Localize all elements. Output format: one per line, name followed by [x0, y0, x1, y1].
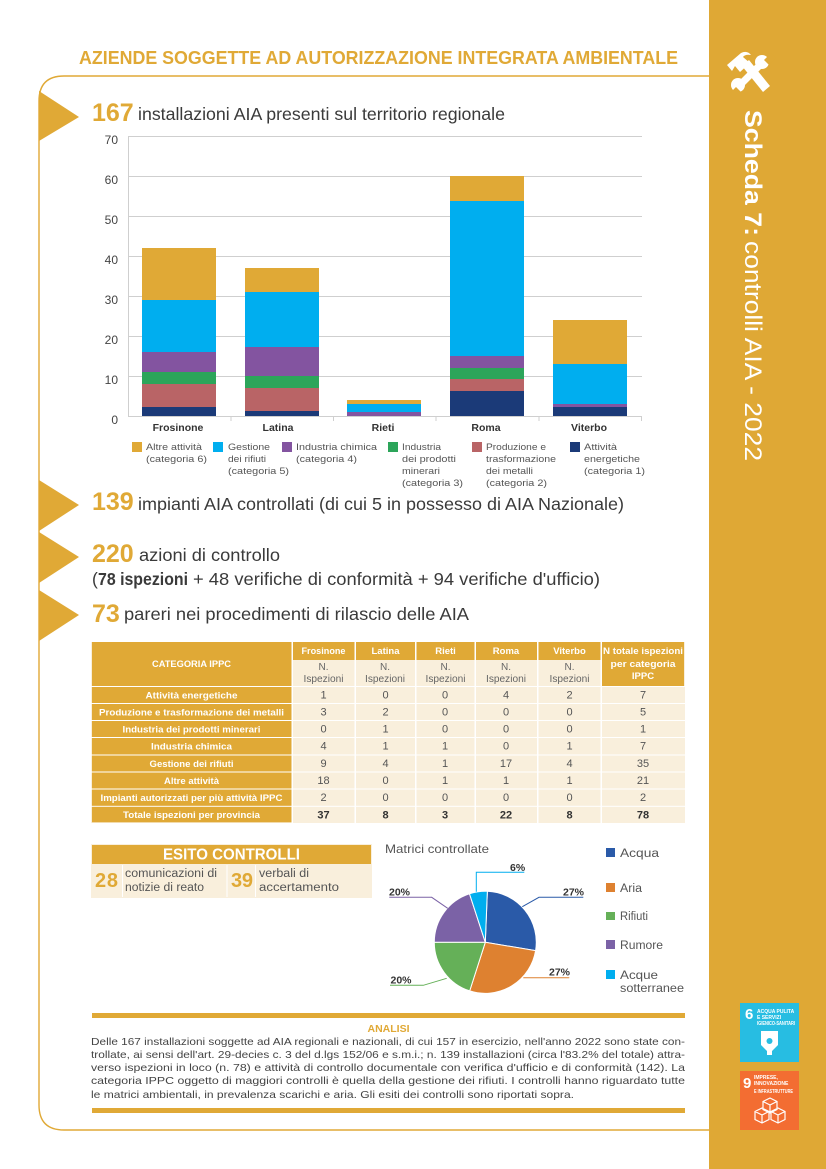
chart legend: minerari	[402, 466, 440, 477]
table values: 0	[382, 792, 389, 804]
table values: 0	[442, 792, 448, 804]
chart legend: trasformazione	[486, 454, 556, 465]
table header: Frosinone	[302, 646, 346, 657]
table header: Ispezioni	[304, 674, 344, 685]
y axis labels: 10	[105, 373, 118, 387]
esito heading	[92, 845, 371, 864]
table values: 8	[566, 810, 573, 822]
esito heading: ESITO CONTROLLI	[163, 846, 300, 864]
analysis text: trollate, ai sensi dell'art. 29-decies c. 3 del d.lgs 152/06 e s.m.i.; n. 139 installazioni (circa l'83.2% del totale) attra-	[91, 1049, 686, 1061]
bar: Frosinone	[142, 248, 216, 416]
stat: 220 control actions: azioni di controllo	[139, 545, 280, 565]
table header: Rieti	[435, 646, 456, 657]
analysis text	[91, 1036, 686, 1101]
table values: 2	[640, 792, 646, 804]
side title: controlli AIA - 2022	[739, 241, 766, 461]
table header: Roma	[493, 646, 520, 657]
table values: 7	[640, 740, 646, 752]
side title	[739, 110, 766, 461]
table values: 3	[320, 706, 327, 718]
table values: 0	[503, 740, 509, 752]
esito: 39 reports	[231, 868, 339, 894]
table values: 9	[320, 758, 327, 770]
table values: 1	[566, 740, 573, 752]
pie legend: Aria	[620, 883, 643, 895]
table values: 1	[503, 775, 509, 787]
table values: 4	[320, 740, 327, 752]
table values: 0	[382, 690, 389, 702]
table values: 2	[320, 792, 327, 804]
y axis labels: 40	[105, 253, 118, 267]
y axis labels: 30	[105, 293, 118, 307]
table header: N totale ispezioni	[603, 646, 683, 657]
chart legend: Gestione	[228, 442, 270, 453]
x axis labels: Viterbo	[571, 422, 607, 434]
stat: 73 opinions	[92, 600, 469, 628]
stat: 220 control actions: + 48 verifiche di conformità + 94 verifiche d'ufficio)	[193, 569, 600, 589]
analysis text: categoria IPPC oggetto di maggiori controlli è quella della gestione dei rifiuti. I controlli hanno riguardato tutte	[91, 1075, 685, 1087]
stat: 73 opinions: pareri nei procedimenti di rilascio delle AIA	[124, 604, 469, 624]
bar: Roma	[450, 176, 524, 416]
x axis labels: Rieti	[372, 422, 394, 434]
pie value labels	[389, 862, 585, 986]
bar: Latina	[245, 268, 319, 416]
stat: 220 control actions	[92, 540, 600, 589]
esito: 28 communications	[95, 868, 217, 894]
table values: 22	[500, 810, 512, 822]
side title: Scheda 7:	[739, 110, 766, 236]
table values: 1	[442, 758, 448, 770]
chart legend: Industria	[402, 442, 442, 453]
table header: N.	[380, 662, 390, 673]
table values: 18	[317, 775, 330, 787]
table: IPPC inspections	[91, 641, 685, 823]
esito: 39 reports: 39	[231, 870, 253, 892]
table row labels: Attività energetiche	[146, 690, 238, 702]
stat: 167 installations: 167	[92, 99, 134, 127]
arrow marker 4	[39, 590, 79, 641]
table values: 1	[382, 740, 389, 752]
pie value labels: 6%	[510, 862, 526, 874]
icon: SDG 9: INNOVAZIONE	[754, 1081, 789, 1087]
table values: 78	[637, 810, 649, 822]
table header: N.	[501, 662, 511, 673]
icon: SDG 6: ACQUA PULITA	[757, 1009, 795, 1015]
table header: Ispezioni	[426, 674, 466, 685]
table header: per categoria	[610, 659, 676, 670]
leader lines	[389, 872, 583, 985]
table values: 5	[640, 706, 646, 718]
chart legend: dei rifiuti	[228, 454, 266, 465]
analysis heading: ANALISI	[368, 1023, 410, 1035]
chart legend: energetiche	[584, 454, 640, 465]
chart legend: Altre attività	[146, 442, 203, 453]
y axis labels: 60	[105, 173, 118, 187]
stat: 167 installations	[92, 99, 505, 127]
table row labels: Produzione e trasformazione dei metalli	[99, 708, 284, 718]
table header: N.	[564, 662, 574, 673]
x axis labels: Frosinone	[153, 422, 204, 434]
table row labels	[92, 687, 292, 822]
analysis text: le matrici ambientali, in prevalenza scarichi e aria. Gli esiti dei controlli sono riportati sopra.	[91, 1089, 574, 1101]
table values: 2	[566, 690, 573, 702]
pie value labels: 27%	[563, 886, 585, 898]
table row labels: Altre attività	[164, 776, 220, 787]
pie chart	[389, 862, 585, 993]
table values: 37	[317, 810, 330, 822]
table values: 1	[566, 775, 573, 787]
pie value labels: 20%	[390, 974, 412, 986]
y axis labels: 0	[111, 413, 118, 427]
table values: 2	[382, 706, 389, 718]
pie legend: Acqua	[620, 848, 660, 860]
pie chart heading: Matrici controllate	[385, 842, 489, 856]
table values: 0	[566, 724, 573, 736]
table header: IPPC	[632, 671, 654, 682]
table values: 21	[637, 775, 649, 787]
arrow marker 3	[39, 532, 79, 583]
pie legend: Rifiuti	[620, 911, 648, 923]
table header: CATEGORIA IPPC	[152, 659, 231, 670]
chart legend: (categoria 2)	[486, 478, 547, 489]
table row labels: Industria chimica	[151, 742, 233, 752]
table values: 8	[382, 810, 389, 822]
chart legend: (categoria 1)	[584, 466, 645, 477]
esito: 28 communications: comunicazioni di	[125, 868, 217, 880]
esito: 39 reports: accertamento	[259, 882, 339, 894]
table values: 0	[442, 690, 448, 702]
x axis labels	[153, 422, 607, 434]
table values: 0	[442, 706, 448, 718]
stat: 220 control actions: 220	[92, 540, 134, 568]
chart legend: Attività	[584, 442, 618, 453]
arrow marker 1	[39, 91, 79, 141]
table row labels: Industria dei prodotti minerari	[122, 724, 260, 736]
pie legend: Acque	[620, 970, 658, 982]
icon: SDG 6: E SERVIZI	[757, 1015, 782, 1021]
table values: 0	[503, 724, 509, 736]
x axis labels: Latina	[263, 422, 294, 434]
chart legend: (categoria 6)	[146, 454, 207, 465]
table values: 3	[442, 810, 448, 822]
stat: 139 plants: impianti AIA controllati (di cui 5 in possesso di AIA Nazionale)	[138, 494, 624, 514]
chart legend: dei prodotti	[402, 454, 456, 465]
table values: 0	[566, 792, 573, 804]
stat: 139 plants: 139	[92, 488, 134, 516]
table row labels: Impianti autorizzati per più attività IPPC	[100, 793, 283, 804]
esito: 28 communications: notizie di reato	[125, 882, 204, 894]
table values: 4	[503, 690, 509, 702]
title: AZIENDE SOGGETTE AD AUTORIZZAZIONE INTEGRATA AMBIENTALE	[79, 47, 678, 68]
arrow marker 2	[39, 480, 79, 531]
chart legend: (categoria 3)	[402, 478, 463, 489]
analysis panel	[91, 1013, 686, 1113]
icon: SDG 9: E INFRASTRUTTURE	[754, 1089, 794, 1095]
analysis text: verso ispezioni in loco (n. 78) e attività di controllo documentale con verifica d'ufficio e di conformità (142). La	[91, 1062, 685, 1074]
chart legend: Produzione e	[486, 442, 546, 453]
icon: SDG 6: IGIENICO-SANITARI	[757, 1021, 795, 1027]
x axis labels: Roma	[471, 422, 501, 434]
chart legend: (categoria 4)	[296, 454, 357, 465]
icon: SDG 6	[740, 1003, 799, 1062]
table values: 17	[500, 758, 512, 770]
icon: SDG 9: 9	[743, 1075, 751, 1092]
stat: 220 control actions: 78 ispezioni	[98, 569, 188, 589]
table values: 0	[566, 706, 573, 718]
page frame	[39, 76, 709, 1130]
icon: SDG 9	[740, 1071, 799, 1130]
table values	[317, 690, 649, 822]
table header: N.	[440, 662, 450, 673]
chart legend: dei metalli	[486, 466, 533, 477]
table header: Latina	[372, 646, 400, 657]
table header: Ispezioni	[365, 674, 405, 685]
table values: 1	[382, 724, 389, 736]
table values: 1	[442, 775, 448, 787]
side band	[709, 0, 826, 1169]
table header: Viterbo	[553, 646, 586, 657]
table values: 35	[637, 758, 649, 770]
analysis text: Delle 167 installazioni soggette ad AIA regionali e nazionali, di cui 157 in esercizio, nell'anno 2022 sono state con-	[91, 1036, 686, 1048]
table row labels: Gestione dei rifiuti	[150, 759, 234, 770]
stat: 139 plants	[92, 488, 624, 516]
bar: Rieti	[347, 400, 421, 416]
esito: 39 reports: verbali di	[259, 868, 309, 880]
y axis labels: 70	[105, 133, 118, 147]
pie value labels: 20%	[389, 886, 411, 898]
table values: 0	[382, 775, 389, 787]
y axis labels: 20	[105, 333, 118, 347]
pie value labels: 27%	[549, 966, 571, 978]
table header	[92, 642, 684, 686]
table header: N.	[318, 662, 328, 673]
table values: 1	[640, 724, 646, 736]
table values: 7	[640, 690, 646, 702]
icon: SDG 6: 6	[745, 1006, 753, 1023]
chart legend: (categoria 5)	[228, 466, 289, 477]
table values: 4	[382, 758, 389, 770]
pie legend: Rumore	[620, 940, 663, 952]
stacked bar chart	[105, 133, 642, 434]
table values: 4	[566, 758, 573, 770]
table values: 1	[442, 740, 448, 752]
table values: 0	[503, 706, 509, 718]
table row labels: Totale ispezioni per provincia	[123, 810, 261, 821]
panel: esito controlli	[91, 844, 372, 898]
chart legend: Industria chimica	[296, 442, 378, 453]
chart legend	[132, 442, 645, 489]
esito: 28 communications: 28	[95, 870, 118, 892]
table values: 0	[442, 724, 448, 736]
icon: SDG 9: IMPRESE,	[754, 1075, 779, 1081]
pie legend	[606, 848, 684, 995]
table header: Ispezioni	[486, 674, 526, 685]
stat: 220 control actions: (	[92, 569, 98, 589]
stat: 73 opinions: 73	[92, 600, 120, 628]
bar: Viterbo	[553, 320, 627, 416]
y axis labels: 50	[105, 213, 118, 227]
table header: Ispezioni	[550, 674, 590, 685]
table values: 0	[503, 792, 509, 804]
table values: 1	[320, 690, 327, 702]
pie legend: sotterranee	[620, 983, 684, 995]
table values: 0	[320, 724, 327, 736]
y axis labels	[105, 133, 118, 427]
stat: 167 installations: installazioni AIA presenti sul territorio regionale	[138, 104, 505, 124]
icon: hammer and wrench	[727, 52, 776, 99]
